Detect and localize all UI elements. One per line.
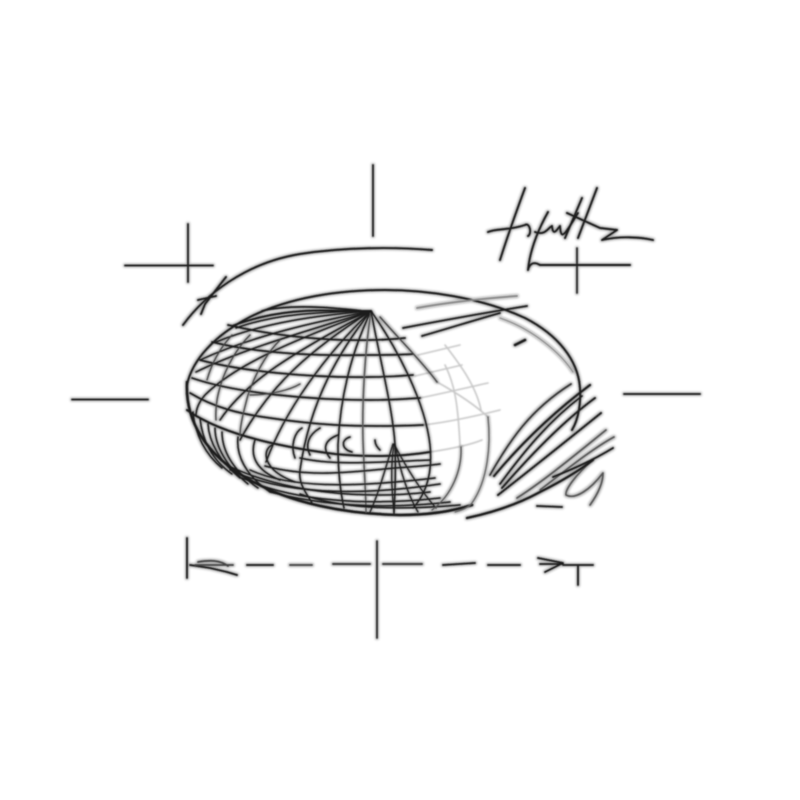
dashed dimension line bbox=[187, 538, 593, 638]
signature scribble bbox=[488, 188, 653, 293]
hatching lower right bbox=[467, 384, 614, 518]
lower rings bbox=[225, 458, 460, 508]
bottom fan strokes bbox=[370, 417, 489, 513]
ellipsoid globe bbox=[187, 290, 580, 515]
secondary left grid strokes bbox=[207, 335, 300, 436]
outer outline bbox=[187, 290, 580, 430]
pole fan meridians left bbox=[196, 307, 437, 513]
hatching top right bbox=[403, 296, 527, 345]
curved rotation arrow bbox=[183, 248, 432, 325]
crosshair marks bbox=[72, 165, 700, 400]
faint right side grid bbox=[415, 345, 500, 452]
belt and latitude lines bbox=[187, 325, 430, 456]
shaded lower left ribs bbox=[193, 412, 380, 492]
